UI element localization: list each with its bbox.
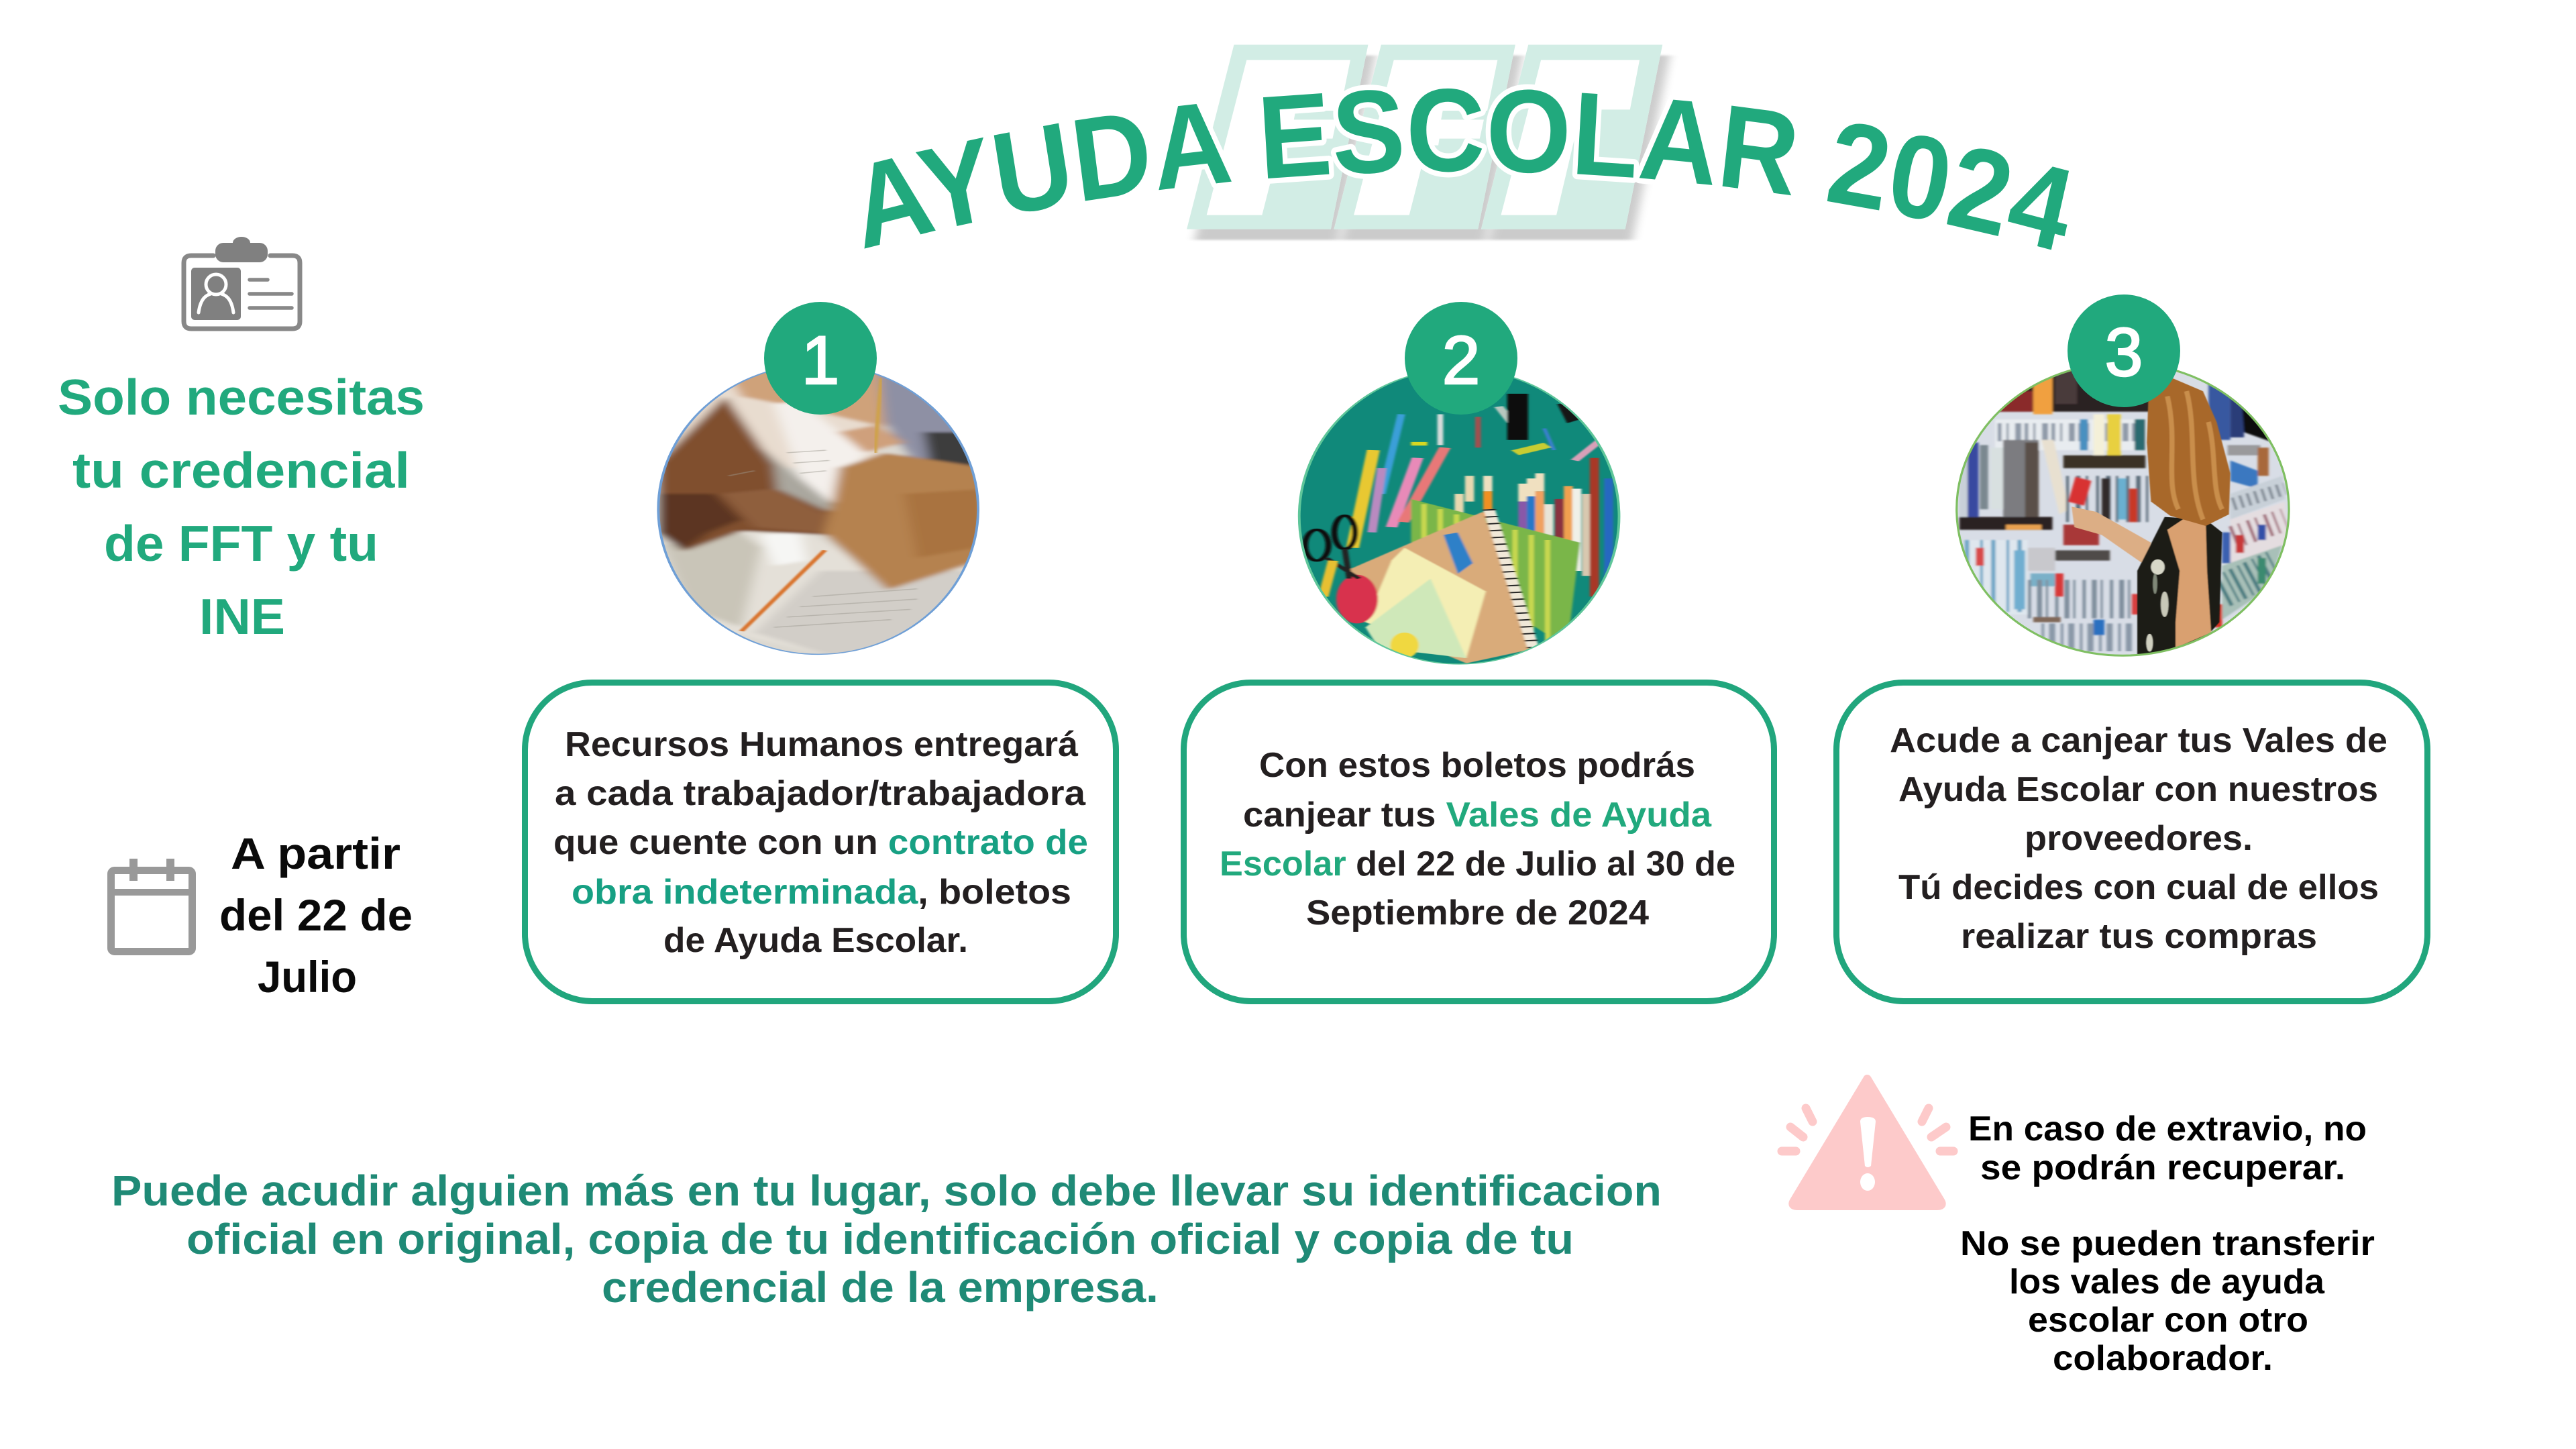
icon: warning triangle (1782, 1079, 1953, 1206)
card: step 3 text (1837, 683, 2427, 1001)
panel: start date (107, 828, 413, 1002)
card: step 1 text: obra indeterminada , boletos (572, 873, 1071, 912)
photo: woman at store shelves (1955, 369, 2290, 657)
card: step 3 text: Acude a canjear tus Vales de (1890, 721, 2387, 760)
panel: step 2 (1183, 302, 1774, 1001)
card: step 1 text (525, 683, 1116, 1001)
text: credential note: de FFT y tu (104, 515, 378, 572)
text: warning conditions: escolar con otro (2028, 1301, 2308, 1340)
text: start date (219, 828, 413, 1002)
card: step 2 text: Septiembre de 2024 (1306, 894, 1649, 932)
card: step 2 text: Escolar del 22 de Julio al 30 de (1220, 845, 1735, 883)
badge: number 3: 3 (2105, 314, 2143, 390)
text block: proxy note: Puede acudir alguien más en tu lugar, solo debe llevar su identificacion (111, 1167, 1662, 1215)
text: credential note (58, 369, 425, 645)
icon: ID card (184, 237, 300, 329)
logo: FFT watermark (1187, 45, 1670, 240)
text: start date: A partir (231, 828, 400, 878)
card: step 2 text (1183, 683, 1774, 1001)
photo: school supplies (1294, 366, 1625, 666)
badge: number 1: 1 (802, 322, 839, 398)
card: step 3 text: proveedores. (2025, 819, 2253, 858)
card: step 1 text: a cada trabajador/trabajadora (555, 774, 1086, 813)
text: warning conditions: En caso de extravio, no (1968, 1110, 2367, 1148)
card: step 1 text: que cuente con un contrato de (553, 823, 1088, 862)
text: start date: Julio (258, 952, 357, 1002)
text: warning conditions: los vales de ayuda (2009, 1263, 2325, 1301)
badge: number 2: 2 (1442, 322, 1480, 398)
card: step 3 text: Tú decides con cual de ellos (1898, 868, 2379, 907)
text: warning conditions: No se pueden transferir (1960, 1224, 2375, 1263)
text: credential note: INE (199, 588, 285, 645)
icon: calendar (107, 859, 196, 951)
panel: credential requirement (58, 237, 425, 645)
text block: proxy note (111, 1167, 1662, 1311)
text: credential note: tu credencial (72, 442, 410, 498)
text: warning conditions: colaborador. (2053, 1339, 2273, 1378)
panel: step 1 (525, 302, 1116, 1001)
badge: number 2 (1405, 302, 1517, 415)
text block: proxy note: credencial de la empresa. (602, 1263, 1159, 1311)
card: step 3 text: realizar tus compras (1961, 917, 2317, 956)
panel: warning (1782, 1079, 2375, 1378)
text: warning conditions (1960, 1110, 2375, 1378)
text: start date: del 22 de (219, 890, 413, 940)
panel: step 3 (1837, 294, 2427, 1001)
badge: number 1 (764, 302, 877, 415)
text: credential note: Solo necesitas (58, 369, 425, 425)
text: warning conditions: se podrán recuperar. (1980, 1148, 2345, 1187)
card: step 1 text: de Ayuda Escolar. (663, 921, 968, 960)
card: step 2 text: canjear tus Vales de Ayuda (1243, 796, 1712, 835)
card: step 1 text: Recursos Humanos entregará (565, 725, 1079, 764)
title: AYUDA ESCOLAR 2024: AYUDA ESCOLAR 2024 (864, 85, 2069, 250)
photo: hands exchanging tickets (657, 372, 979, 655)
text block: proxy note: oficial en original, copia de tu identificación oficial y copia de tu (186, 1215, 1574, 1263)
card: step 2 text: Con estos boletos podrás (1259, 746, 1695, 785)
badge: number 3 (2068, 294, 2180, 407)
card: step 3 text: Ayuda Escolar con nuestros (1898, 770, 2378, 809)
